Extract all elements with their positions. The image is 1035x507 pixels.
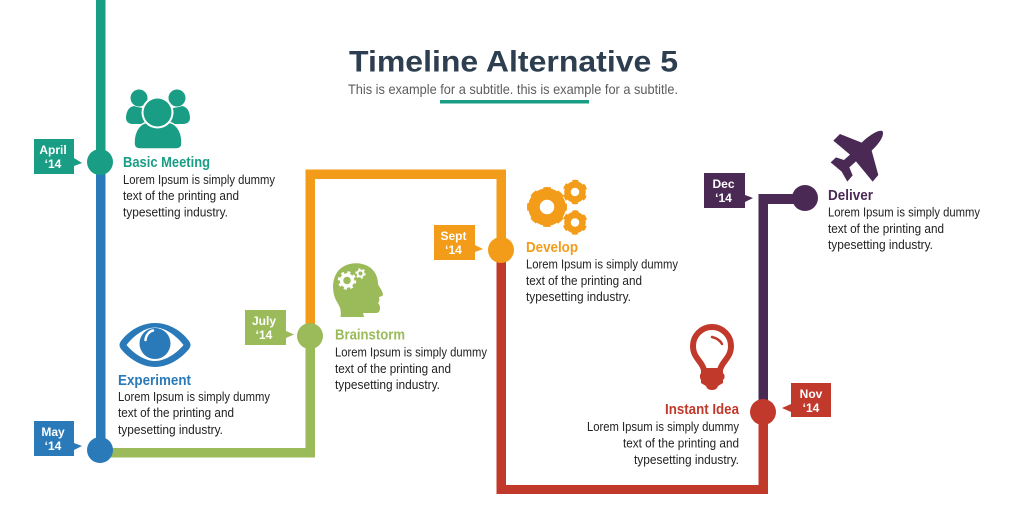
node: July	[297, 323, 323, 349]
date tag: July	[245, 310, 294, 345]
text: Brainstorm description	[335, 346, 488, 392]
date tag: Dec: ‘14	[715, 191, 732, 205]
text: Develop description: text of the printing and	[526, 274, 642, 288]
text: Instant Idea description: Lorem Ipsum is simply dummy	[587, 420, 740, 434]
text: Basic Meeting description	[123, 173, 276, 220]
milestone: Sept	[434, 178, 679, 304]
icon: airplane	[831, 131, 883, 182]
date tag: May: May	[41, 425, 65, 439]
icon: gears	[530, 178, 589, 237]
node: April	[87, 149, 113, 175]
heading: Instant Idea: Instant Idea	[665, 402, 740, 418]
milestone: Dec	[704, 131, 981, 252]
node: Nov	[750, 399, 776, 425]
milestone: April	[34, 90, 276, 220]
line: red	[496, 250, 768, 494]
date tag: Sept: Sept	[440, 229, 467, 243]
title underline	[440, 100, 589, 104]
node: May	[87, 437, 113, 463]
text: Deliver description: text of the printing and	[828, 222, 944, 236]
date tag: April	[34, 139, 82, 174]
date tag: Nov: Nov	[800, 387, 823, 401]
icon: eye	[120, 323, 190, 367]
heading: Deliver: Deliver	[828, 188, 873, 204]
line: blue	[96, 162, 106, 450]
date tag: July: ‘14	[256, 328, 273, 342]
line: green	[100, 336, 315, 458]
text: Instant Idea description: text of the printing and	[623, 436, 739, 450]
text: Basic Meeting description: text of the printing and	[123, 189, 239, 203]
node: Dec	[792, 185, 818, 211]
date tag: July: July	[252, 314, 276, 328]
milestone: July	[245, 263, 488, 392]
text: Develop description: typesetting industry.	[526, 290, 631, 304]
text: Experiment description: typesetting industry.	[118, 423, 223, 437]
date tag: May: ‘14	[45, 439, 62, 453]
icon: people	[126, 90, 190, 149]
header	[348, 46, 678, 104]
text: Deliver description: Lorem Ipsum is simply dummy	[828, 206, 981, 220]
date tag: April: April	[39, 143, 67, 157]
date tag: Nov	[782, 383, 831, 417]
node: Sept	[488, 237, 514, 263]
milestone: Nov	[587, 327, 831, 467]
text: Instant Idea description: typesetting industry.	[634, 453, 739, 467]
timeline path	[96, 0, 805, 494]
date tag: Nov: ‘14	[803, 401, 820, 415]
title: Timeline Alternative 5	[349, 46, 678, 78]
line: teal	[96, 0, 106, 162]
subtitle: This is example for a subtitle. this is example for a subtitle.	[348, 81, 678, 97]
milestone: May	[34, 323, 271, 463]
heading: Experiment: Experiment	[118, 373, 191, 389]
text: Develop description: Lorem Ipsum is simply dummy	[526, 258, 679, 272]
date tag: Dec	[704, 173, 753, 208]
line: orange	[306, 170, 506, 336]
text: Deliver description	[828, 206, 981, 252]
text: Experiment description: text of the printing and	[118, 406, 234, 420]
icon: light bulb	[693, 327, 731, 390]
heading: Basic Meeting: Basic Meeting	[123, 155, 210, 171]
text: Basic Meeting description: Lorem Ipsum is simply dummy	[123, 173, 276, 187]
heading: Develop: Develop	[526, 240, 578, 256]
text: Brainstorm description: text of the printing and	[335, 362, 451, 376]
date tag: April: ‘14	[45, 157, 62, 171]
text: Brainstorm description: Lorem Ipsum is simply dummy	[335, 346, 488, 360]
date tag: May	[34, 421, 82, 456]
icon: head with gears	[333, 263, 383, 317]
date tag: Sept: ‘14	[445, 243, 462, 257]
text: Deliver description: typesetting industry.	[828, 238, 933, 252]
text: Instant Idea description	[587, 420, 740, 467]
date tag: Dec: Dec	[712, 177, 735, 191]
date tag: Sept	[434, 225, 483, 260]
text: Brainstorm description: typesetting industry.	[335, 378, 440, 392]
text: Experiment description: Lorem Ipsum is simply dummy	[118, 390, 271, 404]
text: Basic Meeting description: typesetting industry.	[123, 206, 228, 220]
line: purple	[758, 194, 805, 412]
text: Experiment description	[118, 390, 271, 437]
heading: Brainstorm: Brainstorm	[335, 328, 405, 344]
text: Develop description	[526, 258, 679, 304]
